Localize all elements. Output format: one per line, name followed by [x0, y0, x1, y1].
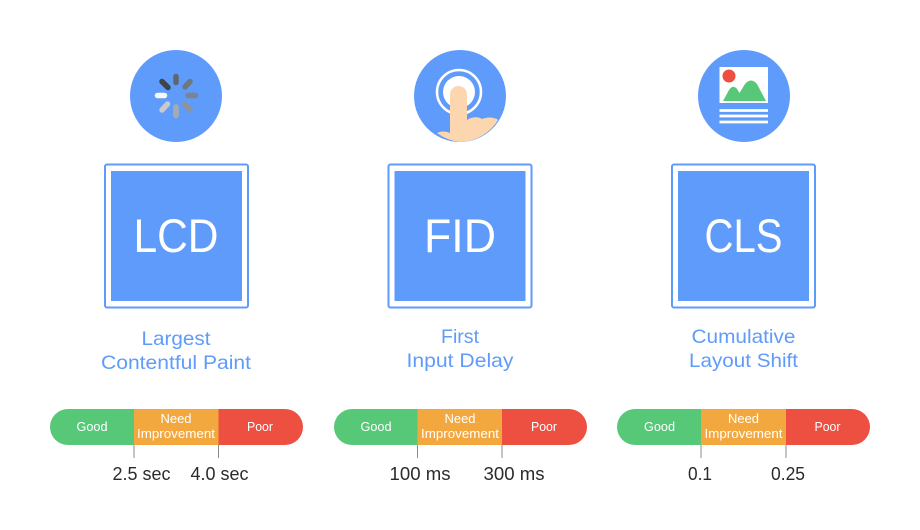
metric box: CLS: [672, 164, 815, 308]
threshold bar: LCD: 2.5 sec: [112, 464, 170, 484]
threshold bar: CLS: [617, 409, 870, 484]
label: Cumulative Layout Shift: Cumulative: [692, 326, 796, 348]
metric box: FID: [388, 164, 532, 308]
label: Cumulative Layout Shift: Layout Shift: [689, 350, 799, 372]
threshold bar: CLS: Poor: [814, 420, 840, 434]
label: Cumulative Layout Shift: [689, 326, 799, 372]
threshold bar: FID: 100 ms: [390, 464, 450, 484]
panel: FID: [334, 50, 587, 484]
threshold bar: LCD: Poor: [247, 420, 273, 434]
threshold bar: FID: Good: [360, 420, 392, 434]
metric box: LCD: [105, 164, 248, 308]
label: Largest Contentful Paint: Largest: [142, 328, 211, 350]
metric box: LCD: LCD: [134, 209, 218, 262]
threshold bar: FID: [334, 409, 587, 484]
threshold bar: LCD: Good: [76, 420, 108, 434]
threshold bar: LCD: [50, 409, 303, 484]
metric box: FID: FID: [424, 209, 496, 262]
icon: loading spinner: [130, 50, 222, 142]
threshold bar: CLS: Need: [728, 412, 759, 426]
threshold bar: CLS: Good: [644, 420, 675, 434]
threshold bar: CLS: Improvement: [704, 427, 783, 441]
threshold bar: FID: 300 ms: [484, 464, 544, 484]
icon: page with image: [698, 50, 790, 142]
threshold bar: CLS: 0.25: [771, 464, 805, 484]
threshold bar: FID: Improvement: [421, 427, 500, 441]
threshold bar: CLS: 0.1: [688, 464, 712, 484]
panel: LCD: [50, 50, 303, 484]
label: First Input Delay: First: [441, 326, 480, 348]
threshold bar: LCD: 4.0 sec: [190, 464, 248, 484]
threshold bar: LCD: Need: [160, 412, 192, 426]
panel: CLS: [617, 50, 870, 484]
metric box: CLS: CLS: [704, 209, 782, 262]
threshold bar: LCD: Improvement: [137, 427, 216, 441]
label: Largest Contentful Paint: Contentful Paint: [101, 352, 252, 374]
label: First Input Delay: Input Delay: [406, 350, 514, 372]
label: Largest Contentful Paint: [101, 328, 252, 374]
label: First Input Delay: [406, 326, 514, 372]
threshold bar: FID: Poor: [531, 420, 557, 434]
icon: finger tap: [414, 50, 506, 142]
threshold bar: FID: Need: [444, 412, 476, 426]
